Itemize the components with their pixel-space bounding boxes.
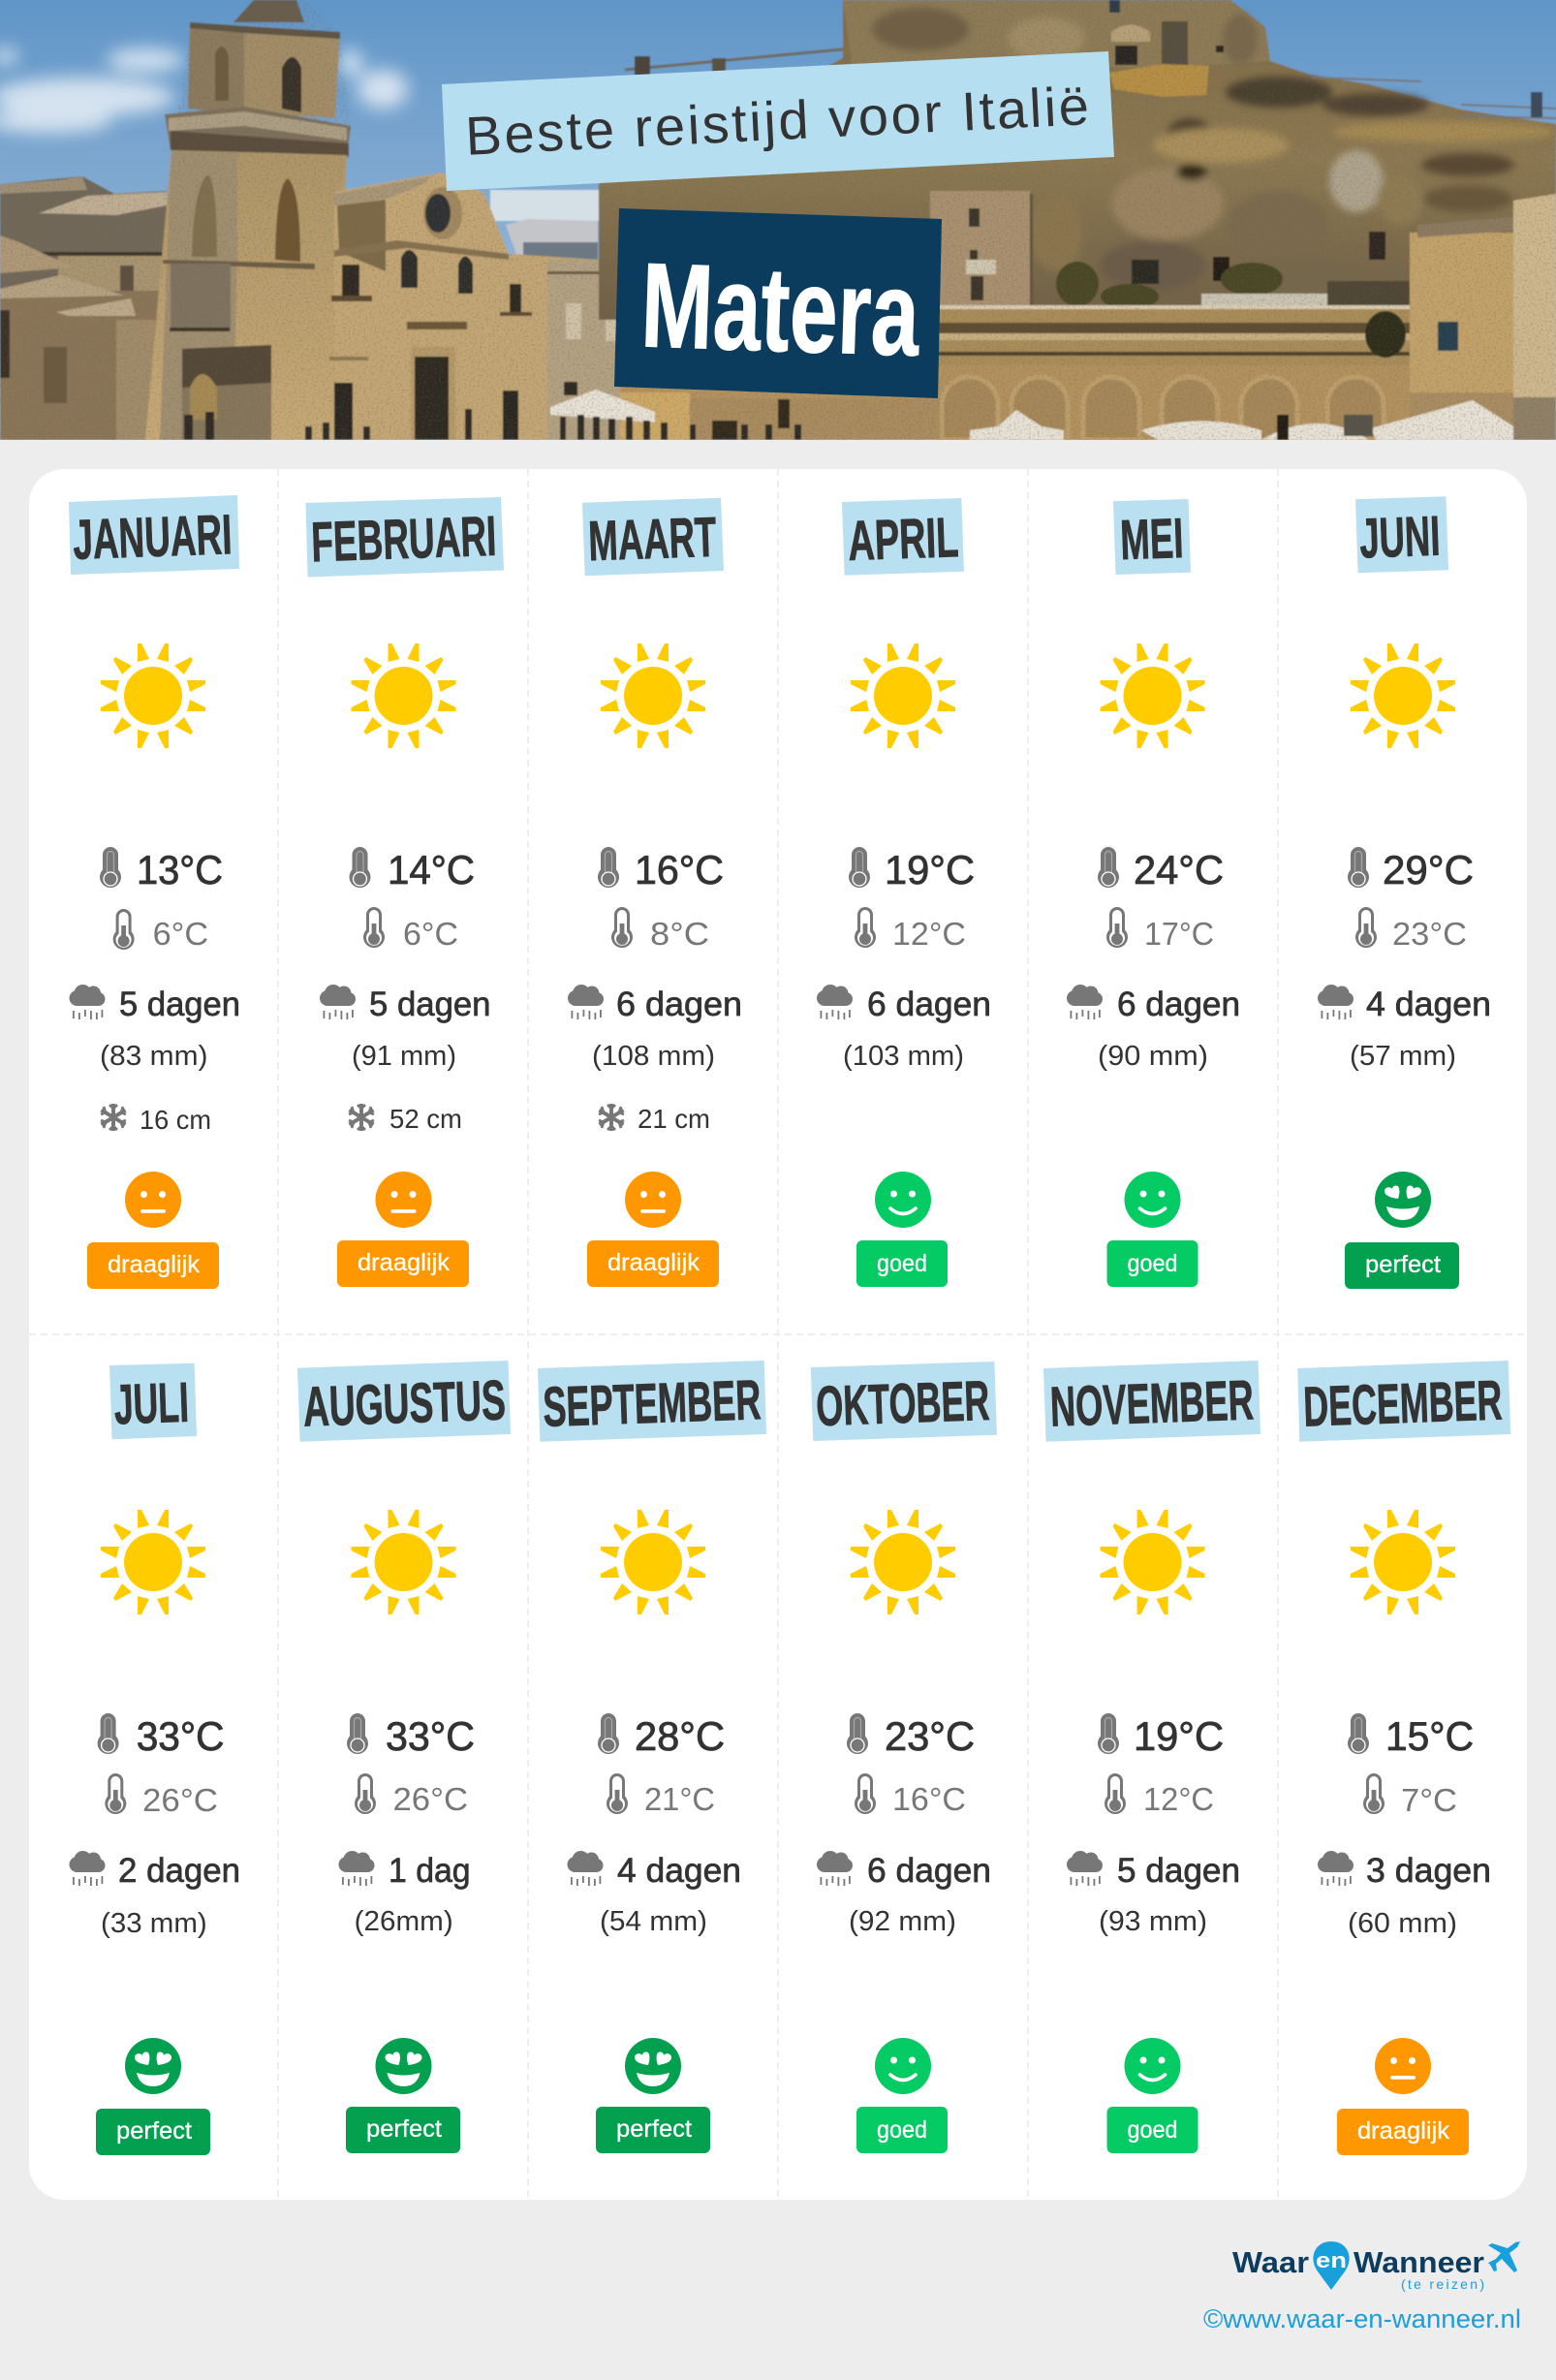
logo: Waar en Wanneer: Waar xyxy=(1232,2245,1309,2279)
rating badge xyxy=(856,2107,948,2153)
icon: sunny xyxy=(101,1510,205,1614)
heading: september xyxy=(538,1361,766,1442)
rating badge xyxy=(346,2107,460,2153)
low temperature: 17°C xyxy=(1144,916,1214,952)
rain days xyxy=(339,1851,471,1890)
rain amount: (33 mm) xyxy=(101,1908,207,1939)
low temperature xyxy=(363,907,458,952)
month: maart xyxy=(568,498,742,1287)
rating badge xyxy=(1337,2109,1469,2155)
subtitle label: Beste reistijd voor Italië xyxy=(442,51,1114,191)
snow xyxy=(101,1104,211,1135)
title label: Matera: Matera xyxy=(639,238,922,382)
rain days: 6 dagen xyxy=(1117,986,1240,1023)
icon: sunny xyxy=(351,643,455,748)
high temperature xyxy=(1348,1713,1474,1759)
low temperature xyxy=(855,1773,966,1817)
low temperature xyxy=(1105,1773,1214,1817)
rain amount: (54 mm) xyxy=(600,1906,707,1937)
rain amount: (108 mm) xyxy=(592,1041,715,1072)
icon: sunny xyxy=(1351,1510,1455,1614)
rain days: 6 dagen xyxy=(867,1852,991,1890)
high temperature xyxy=(349,847,475,892)
month: oktober xyxy=(811,1362,997,2153)
icon: sunny xyxy=(851,1510,955,1614)
rating badge: draaglijk xyxy=(108,1251,201,1278)
high temperature: 33°C xyxy=(137,1713,225,1759)
icon: sunny xyxy=(851,643,955,748)
rating badge: goed xyxy=(1128,2116,1178,2144)
heading: oktober xyxy=(811,1362,997,1441)
panel: monthly climate card xyxy=(29,469,1527,2200)
high temperature xyxy=(347,1713,475,1759)
rain days xyxy=(70,985,240,1023)
low temperature: 7°C xyxy=(1401,1782,1457,1818)
rain amount: (83 mm) xyxy=(100,1041,207,1072)
logo: Waar en Wanneer: Wanneer xyxy=(1354,2245,1484,2279)
month: juli xyxy=(70,1363,240,2155)
heading: september: SEPTEMBER xyxy=(542,1368,762,1439)
rain days xyxy=(1318,1851,1491,1890)
heading: februari xyxy=(306,497,504,578)
rating badge xyxy=(587,1240,719,1287)
heading: april: APRIL xyxy=(847,506,959,573)
rain days: 4 dagen xyxy=(1366,986,1491,1023)
rating badge xyxy=(1106,2107,1198,2153)
low temperature: 26°C xyxy=(393,1781,468,1817)
rating badge: draaglijk xyxy=(607,1249,700,1276)
icon: sunny xyxy=(1101,643,1205,748)
heading: juni: JUNI xyxy=(1358,505,1441,570)
heading: februari: FEBRUARI xyxy=(310,505,497,574)
low temperature: 12°C xyxy=(892,916,966,952)
rating badge xyxy=(96,2109,210,2155)
lower left buildings xyxy=(0,291,165,440)
heading: november: NOVEMBER xyxy=(1049,1368,1255,1439)
high temperature: 19°C xyxy=(885,847,975,892)
rain amount: (60 mm) xyxy=(1348,1908,1457,1939)
rain days xyxy=(817,985,991,1023)
rating face xyxy=(376,1172,432,1228)
stone texture xyxy=(0,0,1556,440)
low temperature: 12°C xyxy=(1143,1781,1214,1817)
rating face xyxy=(1375,2038,1431,2094)
rain days xyxy=(1067,985,1240,1023)
high temperature xyxy=(598,847,724,892)
low temperature xyxy=(1355,907,1467,952)
low temperature: 21°C xyxy=(644,1781,715,1817)
icon: sunny xyxy=(601,643,705,748)
low temperature xyxy=(1106,907,1214,952)
icon: sunny xyxy=(1351,643,1455,748)
rating face xyxy=(125,2038,181,2094)
rain amount: (26mm) xyxy=(355,1906,453,1937)
rating face xyxy=(875,2038,931,2094)
logo: Waar en Wanneer xyxy=(1232,2241,1520,2292)
heading: mei xyxy=(1113,499,1191,575)
rating badge: perfect xyxy=(1365,1251,1441,1278)
rain days: 3 dagen xyxy=(1366,1852,1491,1890)
rating badge: goed xyxy=(877,1250,927,1277)
rating badge xyxy=(856,1240,948,1287)
rain days: 4 dagen xyxy=(617,1852,741,1890)
month: juni xyxy=(1318,496,1491,1289)
logo: Waar en Wanneer: (te reizen) xyxy=(1401,2276,1484,2292)
high temperature: 16°C xyxy=(635,847,724,892)
high temperature: 15°C xyxy=(1385,1713,1474,1759)
low temperature: 23°C xyxy=(1392,916,1467,952)
heading: augustus xyxy=(297,1361,511,1442)
low temperature xyxy=(1363,1773,1457,1818)
rating face xyxy=(1124,1172,1180,1228)
rating badge xyxy=(596,2107,710,2153)
rain days: 6 dagen xyxy=(867,986,991,1023)
heading: juli: JULI xyxy=(113,1371,190,1436)
snow xyxy=(599,1104,710,1134)
rain amount: (90 mm) xyxy=(1098,1041,1208,1072)
snow: 21 cm xyxy=(638,1104,710,1134)
rain days: 5 dagen xyxy=(369,986,490,1023)
heading: november xyxy=(1043,1361,1260,1442)
rain days: 5 dagen xyxy=(119,986,240,1023)
icon: sunny xyxy=(1101,1510,1205,1614)
rating face xyxy=(125,1172,181,1228)
low temperature: 16°C xyxy=(892,1781,966,1817)
month: december xyxy=(1297,1361,1510,2155)
rating badge: draaglijk xyxy=(1357,2117,1450,2145)
footer: website: ©www.waar-en-wanneer.nl xyxy=(1203,2304,1521,2333)
heading: augustus: AUGUSTUS xyxy=(302,1368,507,1439)
high temperature: 19°C xyxy=(1134,1713,1224,1759)
header photo: Matera xyxy=(0,0,1556,446)
low temperature: 26°C xyxy=(142,1782,218,1818)
rating badge: goed xyxy=(1128,1250,1178,1277)
rating face xyxy=(875,1172,931,1228)
rain days xyxy=(568,1851,741,1890)
terrace wall and arches xyxy=(930,305,1415,365)
heading: mei: MEI xyxy=(1119,507,1184,572)
umbrellas and people xyxy=(550,390,1513,440)
church facade xyxy=(334,172,620,440)
rain days: 6 dagen xyxy=(616,986,742,1023)
low temperature xyxy=(105,1773,218,1818)
month: januari xyxy=(69,495,240,1289)
rating face xyxy=(1375,1172,1431,1228)
far town xyxy=(490,190,599,221)
snow xyxy=(349,1104,462,1134)
left back buildings xyxy=(0,176,167,291)
heading: juli xyxy=(109,1363,197,1439)
high temperature xyxy=(100,847,223,892)
heading: april xyxy=(842,498,964,576)
high temperature: 24°C xyxy=(1134,847,1224,892)
rain amount: (57 mm) xyxy=(1350,1041,1456,1072)
rain days xyxy=(1067,1851,1240,1890)
bell tower xyxy=(233,0,304,22)
rating badge: goed xyxy=(877,2116,927,2144)
rating face xyxy=(1124,2038,1180,2094)
icon: location pin: en xyxy=(1316,2248,1347,2272)
brick building xyxy=(930,191,1030,307)
low temperature: 8°C xyxy=(650,916,709,952)
rating badge: perfect xyxy=(616,2115,692,2143)
rating badge xyxy=(1345,1242,1459,1289)
rain days: 2 dagen xyxy=(118,1852,240,1890)
rain days xyxy=(568,985,742,1023)
high temperature: 28°C xyxy=(635,1713,725,1759)
rating face xyxy=(625,1172,681,1228)
month: september xyxy=(538,1361,766,2153)
snow: 52 cm xyxy=(389,1104,462,1134)
low temperature: 6°C xyxy=(403,916,458,952)
month: april xyxy=(817,498,991,1287)
right buildings xyxy=(1409,232,1514,393)
month: november xyxy=(1043,1361,1260,2153)
snow: 16 cm xyxy=(140,1105,211,1135)
rating badge xyxy=(87,1242,219,1289)
heading: maart xyxy=(582,498,724,576)
high temperature: 23°C xyxy=(885,1713,975,1759)
heading: januari xyxy=(69,495,239,575)
rain days: 1 dag xyxy=(389,1852,471,1890)
rain days xyxy=(320,985,490,1023)
subtitle label: Beste reistijd voor Italië: Beste reistijd voor Italië xyxy=(464,75,1090,167)
rain days xyxy=(1318,985,1491,1023)
icon: location pin xyxy=(1313,2241,1350,2290)
rating badge xyxy=(1106,1240,1198,1287)
high temperature: 13°C xyxy=(137,847,223,892)
high temperature: 14°C xyxy=(388,847,475,892)
month: mei xyxy=(1067,499,1240,1287)
rating face xyxy=(625,2038,681,2094)
low temperature xyxy=(355,1773,468,1817)
low temperature xyxy=(113,909,208,952)
heading: maart: MAART xyxy=(587,506,717,573)
icon: sunny xyxy=(351,1510,455,1614)
rating face xyxy=(376,2038,432,2094)
icon: sunny xyxy=(101,643,205,748)
icon: sunny xyxy=(601,1510,705,1614)
rating badge: perfect xyxy=(116,2117,192,2145)
rain amount: (103 mm) xyxy=(843,1041,964,1072)
month: augustus xyxy=(297,1361,511,2153)
high temperature: 29°C xyxy=(1383,847,1474,892)
low temperature: 6°C xyxy=(153,916,208,952)
heading: juni xyxy=(1355,496,1448,573)
low temperature xyxy=(607,1773,715,1817)
low temperature xyxy=(855,907,966,952)
high temperature xyxy=(98,1713,224,1759)
rain days xyxy=(70,1851,240,1890)
rain days xyxy=(817,1851,991,1890)
rain days: 5 dagen xyxy=(1117,1852,1240,1890)
month: februari xyxy=(306,497,504,1287)
title label: Matera xyxy=(614,208,942,398)
high temperature: 33°C xyxy=(386,1713,475,1759)
low temperature xyxy=(611,907,709,952)
rating badge: perfect xyxy=(366,2115,442,2143)
rain amount: (91 mm) xyxy=(352,1041,456,1072)
heading: oktober: OKTOBER xyxy=(815,1369,990,1438)
railing above label xyxy=(625,48,853,70)
icon: plane xyxy=(1488,2241,1520,2272)
rain amount: (93 mm) xyxy=(1099,1906,1207,1937)
hillside rock xyxy=(599,0,1556,320)
rating badge xyxy=(337,1240,469,1287)
rain amount: (92 mm) xyxy=(849,1906,956,1937)
heading: januari: JANUARI xyxy=(72,503,233,572)
rating badge: draaglijk xyxy=(358,1249,451,1276)
